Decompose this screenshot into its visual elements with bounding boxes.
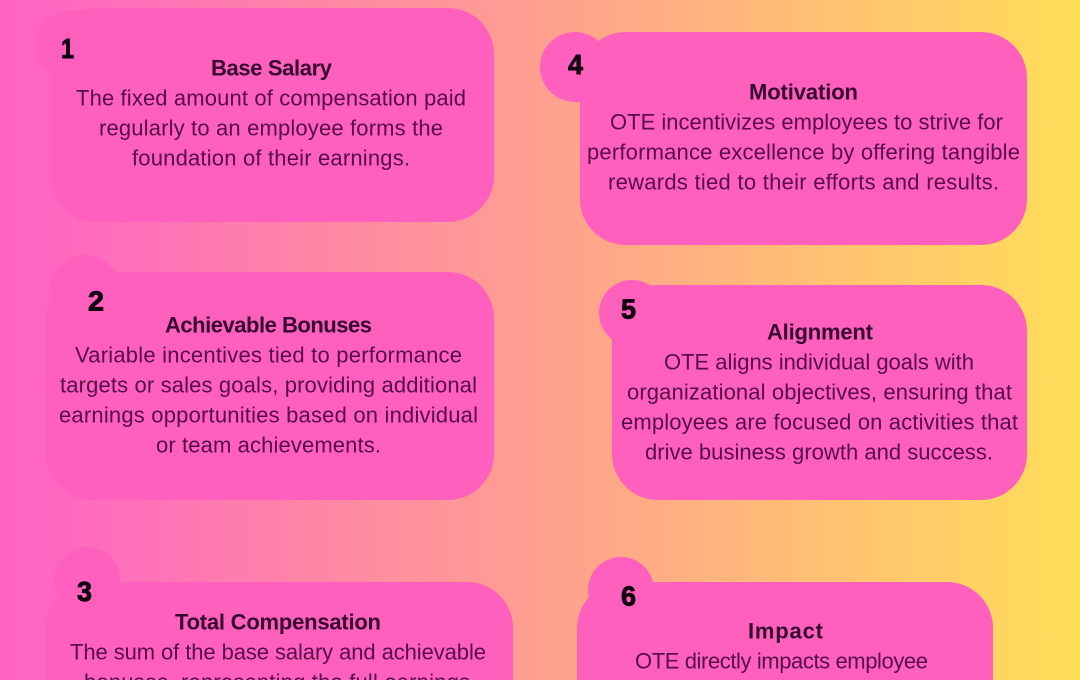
text: alignment description: organizational objectives, ensuring that <box>627 380 1012 404</box>
text: total compensation description: The sum of the base salary and achievable <box>70 640 486 664</box>
heading: total compensation: Total Compensation <box>175 610 381 634</box>
number badge 4: 4 <box>568 49 583 80</box>
panel: motivation <box>540 32 1027 245</box>
number badge 4 <box>540 32 1027 245</box>
panel: impact <box>577 557 993 680</box>
number badge 5 <box>599 280 1027 500</box>
text: alignment description: employees are focused on activities that <box>621 410 1018 434</box>
panel: base salary <box>35 8 494 222</box>
text: motivation description <box>587 110 1020 194</box>
text: alignment description <box>621 350 1018 464</box>
heading: impact: Impact <box>748 618 824 644</box>
number badge 1: 1 <box>61 33 74 64</box>
number badge 5: 5 <box>621 294 636 324</box>
number badge 3: 3 <box>77 576 92 607</box>
text: achievable bonuses description: targets or sales goals, providing additional <box>60 372 477 398</box>
panel: achievable bonuses <box>46 255 494 500</box>
number badge 1 <box>35 8 494 222</box>
text: impact description: OTE directly impacts employee <box>635 648 928 674</box>
text: achievable bonuses description: earnings opportunities based on individual <box>59 402 478 428</box>
text: alignment description: OTE aligns individual goals with <box>664 350 974 374</box>
panel: total compensation <box>46 547 513 680</box>
text: base salary description <box>76 86 466 170</box>
text: total compensation description <box>70 640 486 680</box>
number badge 2: 2 <box>88 286 104 316</box>
number badge 6: 6 <box>621 580 636 612</box>
text: base salary description: foundation of their earnings. <box>132 146 410 170</box>
text: alignment description: drive business growth and success. <box>645 440 993 464</box>
text: achievable bonuses description: or team achievements. <box>156 432 381 458</box>
number badge 3 <box>46 547 513 680</box>
heading: motivation: Motivation <box>749 80 858 104</box>
heading: alignment: Alignment <box>767 320 874 344</box>
heading: achievable bonuses: Achievable Bonuses <box>165 312 372 338</box>
panel: alignment <box>599 280 1027 500</box>
text: motivation description: rewards tied to their efforts and results. <box>608 170 999 194</box>
text: achievable bonuses description: Variable incentives tied to performance <box>75 342 462 368</box>
text: motivation description: performance excellence by offering tangible <box>587 140 1020 164</box>
text: base salary description: regularly to an employee forms the <box>99 116 443 140</box>
text: base salary description: The fixed amount of compensation paid <box>76 86 466 110</box>
text: achievable bonuses description <box>59 342 478 458</box>
number badge 2 <box>46 255 494 500</box>
text: motivation description: OTE incentivizes employees to strive for <box>610 110 1003 134</box>
number badge 6 <box>577 557 993 680</box>
heading: base salary: Base Salary <box>211 56 333 80</box>
